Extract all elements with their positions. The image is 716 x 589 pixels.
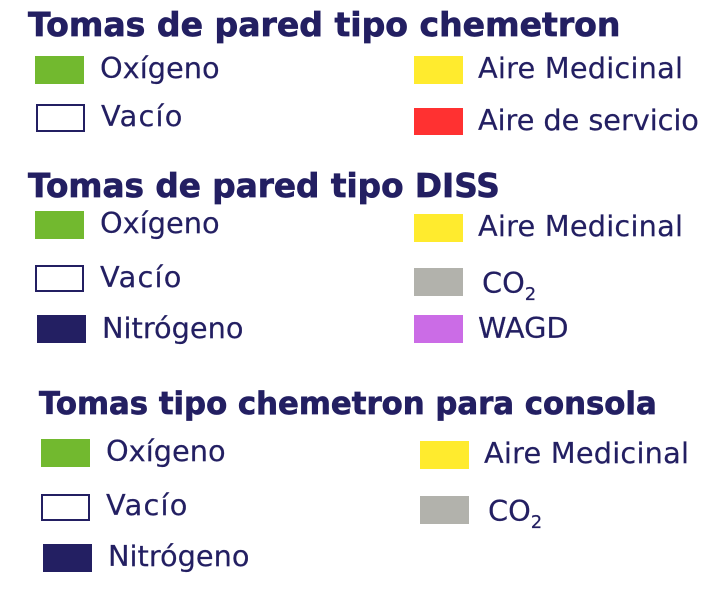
swatch: vacuum [36,104,85,132]
swatch: medical air [420,441,469,469]
label: oxygen: Oxígeno [100,206,220,240]
label: nitrogen: Nitrógeno [102,311,244,345]
label: oxygen: Oxígeno [106,434,226,468]
label: medical air: Aire Medicinal [478,51,683,85]
label: service air: Aire de servicio [478,103,699,137]
swatch: oxygen [41,439,90,467]
swatch: CO2 [420,496,469,524]
label: vacuum: Vacío [106,488,189,522]
heading: chemetron console outlets: Tomas tipo chemetron para consola [39,386,657,422]
label: nitrogen: Nitrógeno [108,539,250,573]
label: oxygen: Oxígeno [100,51,220,85]
label: WAGD: WAGD [478,311,569,345]
swatch: WAGD [414,315,463,343]
swatch: vacuum [35,265,84,292]
swatch: nitrogen [43,544,92,572]
heading: DISS wall outlets: Tomas de pared tipo DISS [28,167,500,205]
swatch: service air [414,108,463,135]
swatch: nitrogen [37,315,86,343]
section: chemetron wall outlets [28,5,699,137]
label: CO2: CO2 [482,266,536,305]
swatch: oxygen [35,211,84,239]
swatch: medical air [414,56,463,84]
label: CO2: CO2 [488,494,542,533]
swatch: medical air [414,214,463,242]
section: DISS wall outlets [28,167,683,345]
label: medical air: Aire Medicinal [478,209,683,243]
section: chemetron console outlets [38,386,689,573]
label: vacuum: Vacío [101,99,184,133]
swatch: oxygen [35,56,84,84]
label: vacuum: Vacío [100,260,183,294]
swatch: vacuum [41,494,90,521]
swatch: CO2 [414,268,463,296]
heading: chemetron wall outlets: Tomas de pared tipo chemetron [28,5,620,44]
label: medical air: Aire Medicinal [484,436,689,470]
